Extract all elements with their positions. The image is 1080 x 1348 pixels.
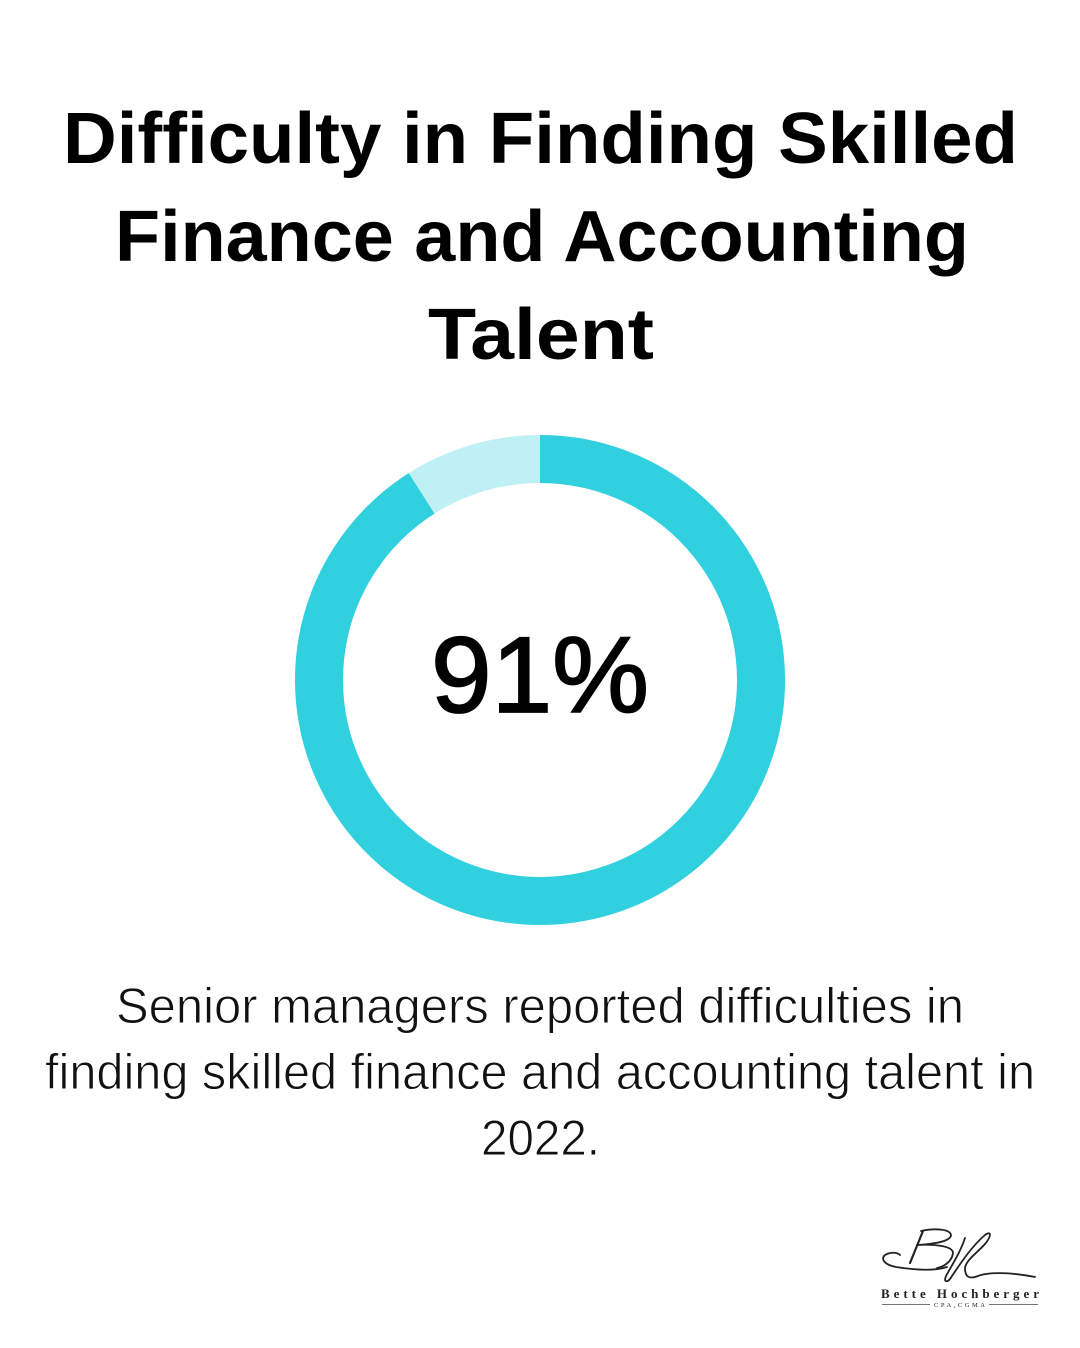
logo credentials: CPA,CGMA: [934, 1302, 985, 1309]
description text: finding skilled finance and accounting talent in: [45, 1044, 1035, 1100]
signature monogram: [883, 1229, 1035, 1281]
logo: Bette Hochberger signature: [881, 1229, 1039, 1309]
description text: [45, 978, 1035, 1166]
title: Finance and Accounting: [115, 197, 969, 277]
logo name: Bette Hochberger: [881, 1286, 1039, 1301]
description text: Senior managers reported difficulties in: [116, 978, 964, 1034]
donut value: 91%: [431, 614, 649, 735]
description text: 2022.: [481, 1110, 600, 1166]
donut chart: 91%: [319, 459, 761, 901]
title: Difficulty in Finding Skilled: [63, 99, 1018, 179]
title: Talent: [428, 295, 654, 375]
title: [63, 99, 1018, 375]
